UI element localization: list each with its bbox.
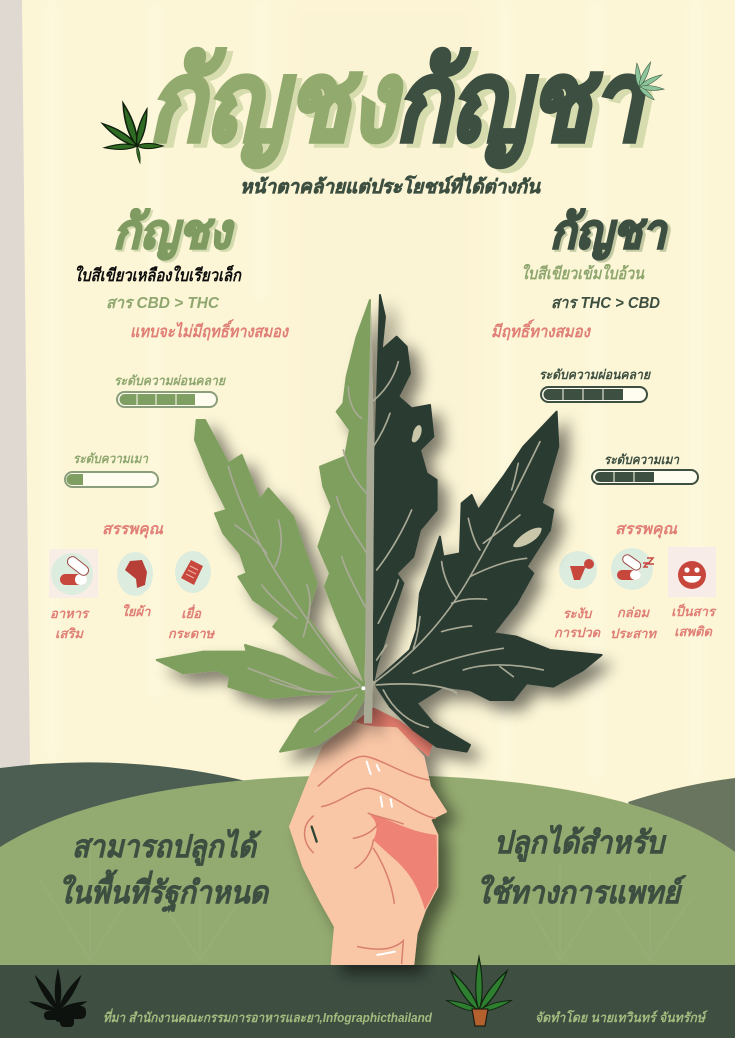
label: เป็นสารเสพติด bbox=[671, 603, 717, 639]
text: left hill caption bbox=[58, 828, 270, 913]
label: กล่อมประสาท bbox=[610, 605, 657, 641]
heading: กัญชง: กัญชง bbox=[115, 208, 237, 262]
heading: benefits: สรรพคุณ bbox=[102, 521, 164, 539]
label: relaxation: ระดับความผ่อนคลาย bbox=[114, 373, 226, 388]
text: effect: มีฤทธิ์ทางสมอง bbox=[491, 319, 592, 341]
footer: potted cannabis icon bbox=[446, 957, 512, 1026]
icon: small leaf left of title bbox=[101, 102, 163, 163]
label: intoxication: ระดับความเมา bbox=[73, 451, 149, 466]
hill: dark left bbox=[0, 762, 250, 900]
label: เยื่อกระดาษ: เยื่อ bbox=[181, 604, 202, 621]
label: ระงับการปวด: การปวด bbox=[554, 625, 602, 640]
label: ระงับการปวด: ระงับ bbox=[563, 606, 593, 621]
footer: source text: ที่มา สำนักงานคณะกรรมการอาหารและยา,Infographicthailand bbox=[103, 1008, 433, 1025]
label: ระงับการปวด bbox=[554, 606, 602, 640]
icon: capsule supplement bbox=[49, 549, 98, 598]
label: relaxation: ระดับความผ่อนคลาย bbox=[539, 367, 651, 382]
text: left hill caption: ในพื้นที่รัฐกำหนด bbox=[58, 869, 270, 913]
heading: กัญชา: กัญชา bbox=[550, 206, 668, 260]
text: leaf colour: ใบสีเขียวเหลืองใบเรียวเล็ก bbox=[74, 264, 242, 285]
text: right hill caption bbox=[476, 824, 686, 910]
text: THC > CBD: สาร THC > CBD bbox=[551, 295, 660, 312]
bar: relaxation level bbox=[117, 392, 217, 407]
bar: relaxation level bbox=[541, 387, 647, 402]
label: อาหารเสริม: เสริม bbox=[55, 626, 84, 641]
leaf: central stem bbox=[364, 310, 374, 723]
footer: black leaf icon with pills bbox=[28, 968, 88, 1027]
title: กัญชงกัญชา bbox=[148, 39, 652, 172]
label: อาหารเสริม: อาหาร bbox=[50, 606, 90, 621]
title: กัญชงกัญชา: กัญชา bbox=[402, 43, 652, 172]
footer: credit text: จัดทำโดย นายเทวินทร์ จันทรักษ์ bbox=[535, 1009, 708, 1025]
title: กัญชงกัญชา: กัญชง bbox=[148, 39, 403, 168]
icon: fabric bbox=[117, 552, 153, 596]
heading: กัญชา: กัญชา bbox=[552, 208, 671, 262]
icon: paper bbox=[175, 551, 211, 593]
hill: dark right bbox=[628, 778, 735, 900]
footer band bbox=[0, 965, 735, 1038]
icon: euphoric face bbox=[668, 547, 716, 597]
bar: intoxication level bbox=[592, 470, 698, 484]
text: left hill caption: สามารถปลูกได้ bbox=[72, 828, 262, 866]
text: effect: แทบจะไม่มีฤทธิ์ทางสมอง bbox=[130, 319, 290, 341]
heading: กัญชง: กัญชง bbox=[113, 206, 234, 260]
decorative faint leaves on the hill bbox=[40, 850, 690, 960]
hand holding leaf bbox=[290, 707, 446, 964]
heading: benefits: สรรพคุณ bbox=[615, 521, 678, 539]
label: เป็นสารเสพติด: เป็นสาร bbox=[671, 603, 717, 619]
icon: pain relief bbox=[559, 551, 597, 589]
hill: green centre bbox=[0, 775, 735, 970]
subtitle: หน้าตาคล้ายแต่ประโยชน์ที่ได้ต่างกัน bbox=[240, 173, 541, 198]
label: เป็นสารเสพติด: เสพติด bbox=[674, 624, 713, 639]
leaf: green left half bbox=[157, 300, 370, 752]
label: เยื่อกระดาษ bbox=[168, 604, 216, 641]
label: ใยผ้า: ใยผ้า bbox=[122, 604, 151, 619]
label: เยื่อกระดาษ: กระดาษ bbox=[168, 626, 216, 641]
label: intoxication: ระดับความเมา bbox=[604, 452, 680, 467]
text: right hill caption: ใช้ทางการแพทย์ bbox=[476, 874, 686, 910]
label: กล่อมประสาท: กล่อม bbox=[617, 605, 651, 620]
panel: กัญชง bbox=[49, 206, 290, 641]
text: right hill caption: ปลูกได้สำหรับ bbox=[494, 824, 667, 862]
label: อาหารเสริม bbox=[50, 606, 90, 641]
title: กัญชงกัญชา: กัญชา bbox=[395, 39, 645, 168]
title: กัญชงกัญชา: กัญชง bbox=[155, 43, 407, 172]
text: CBD > THC: สาร CBD > THC bbox=[106, 295, 219, 312]
icon: sleeping capsule bbox=[611, 548, 654, 590]
panel: กัญชา bbox=[491, 206, 717, 641]
leaf: dark right half bbox=[370, 295, 602, 752]
bar: intoxication level bbox=[65, 472, 158, 487]
cannabis leaf: half green, half dark bbox=[157, 295, 602, 752]
label: กล่อมประสาท: ประสาท bbox=[610, 626, 657, 641]
icon: small leaf right of title bbox=[635, 61, 664, 101]
text: leaf colour: ใบสีเขียวเข้มใบอ้วน bbox=[521, 263, 645, 283]
